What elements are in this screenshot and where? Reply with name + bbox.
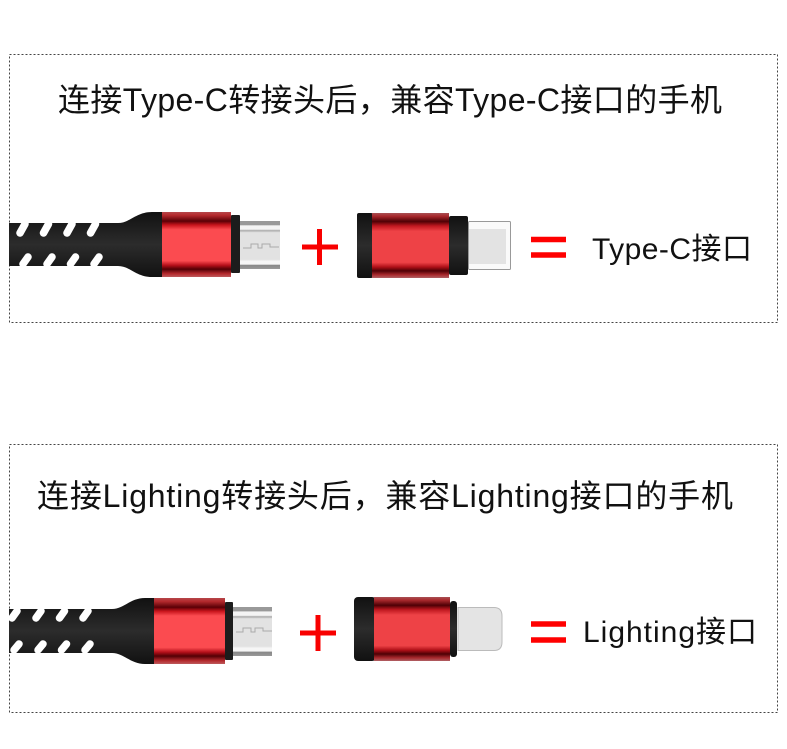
icon: micro USB cable with red housing (9, 598, 272, 664)
icon: Type-C adapter (357, 213, 510, 278)
heading: Type-C compatibility: 连接Type-C转接头后，兼容Type-C接口的手机 (58, 82, 722, 118)
icon: plus sign (302, 229, 338, 265)
label: Type-C port: Type-C接口 (592, 233, 752, 266)
icon: plus sign (300, 615, 336, 651)
heading: Lightning compatibility: 连接Lighting转接头后，兼容Lighting接口的手机 (37, 478, 733, 514)
icon: equals sign (531, 240, 566, 255)
icon: Lightning adapter (354, 597, 502, 661)
panel: Lightning adapter (9, 444, 778, 712)
panel: Type-C adapter (9, 54, 778, 322)
icon: equals sign (531, 624, 566, 640)
label: Lighting port: Lighting接口 (583, 616, 757, 649)
icon: micro USB cable with red housing (9, 212, 280, 277)
